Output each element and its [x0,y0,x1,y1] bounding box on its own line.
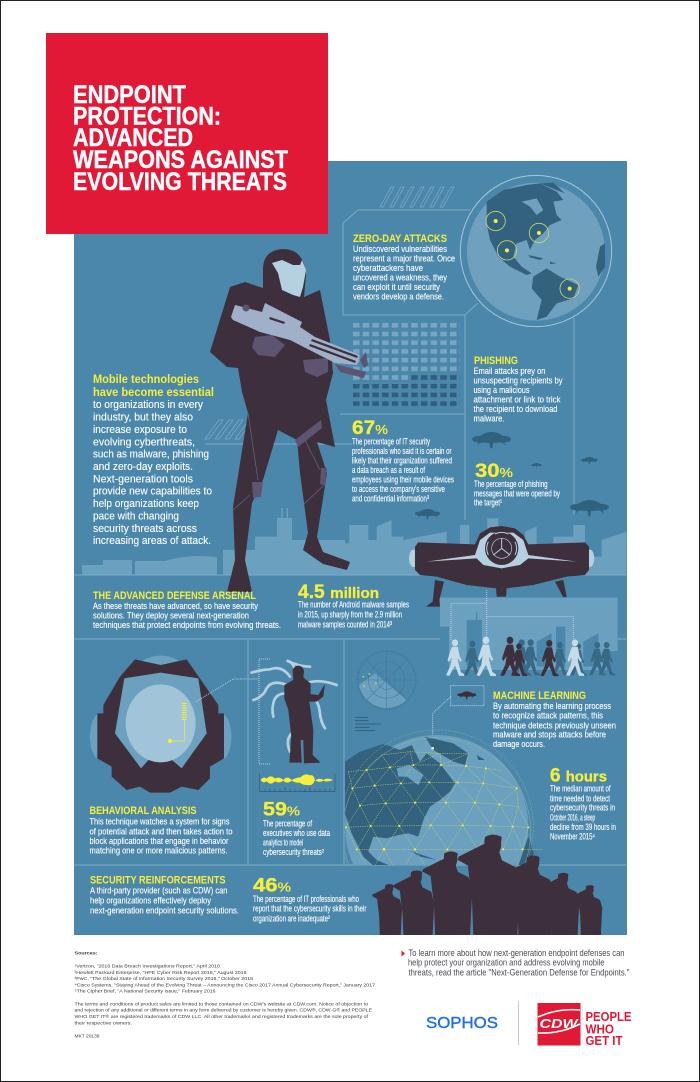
text: machine learning [493,690,616,749]
stat: 4.5 million: in 2015, up sharply from the 2.9 million [298,609,402,619]
text: mobile technologies intro: evolving cyberthreats, [93,436,195,448]
stat: 30 percent: messages that were opened by [474,488,560,498]
text: mobile technologies intro: help organizations keep [93,498,199,510]
text: security reinforcements: next-generation endpoint security solutions. [90,905,239,915]
text: zero-day attacks: vendors develop a defense. [353,292,444,302]
stat: 46 percent: 46 % [253,876,292,897]
illustration: saluting soldiers [372,834,602,1018]
stat: 59 percent: cybersecurity threats² [263,847,324,857]
sources and legal text [74,951,375,1039]
stat: 67 percent [352,418,454,504]
text: behavioral analysis: BEHAVIORAL ANALYSIS [90,805,196,817]
text: mobile technologies intro: increase exposure to [93,424,187,436]
text: zero-day attacks: ZERO-DAY ATTACKS [353,233,447,245]
text: zero-day attacks [353,233,455,302]
heading: ENDPOINT [73,81,186,109]
stat: 4.5 million: 4.5 million [298,582,379,603]
text: phishing: the recipient to download [474,404,558,414]
stat: 67 percent: The percentage of IT security [352,436,430,446]
icon: building block behind crowd [440,590,618,670]
stat: 4.5 million: The number of Android malware samples [298,600,409,610]
text: advanced defense arsenal: THE ADVANCED DEFENSE ARSENAL [93,590,256,602]
text: advanced defense arsenal: solutions. They deploy several next-generation [93,611,249,621]
text: mobile technologies intro [93,372,214,547]
stat: 30 percent [474,461,560,508]
stat: 6 hours: November 2015⁴ [550,831,595,841]
stat: 59 percent: executives who use data [263,828,330,838]
stat: 4.5 million [298,582,409,629]
text: mobile technologies intro: Next-generation tools [93,473,193,485]
stat: 6 hours: decline from 39 hours in [550,822,616,832]
stat: 46 percent: organization are inadequate² [253,913,330,923]
stat: 46 percent: report that the cybersecurity skills in their [253,904,366,914]
stat: 67 percent: 67% [352,418,388,439]
call to action [402,948,630,978]
sources and legal text: MKT 20139 [74,1033,100,1039]
sources and legal text: ⁵The Cipher Brief, "A National Security Issue," February 2016 [74,989,216,995]
sources and legal text: ¹Verizon, "2016 Data Breach Investigations Report," April 2016 [74,964,220,970]
text: mobile technologies intro: to organizations in every [93,399,203,411]
text: phishing [474,355,563,424]
heading: ADVANCED [73,124,193,152]
logo: CDW: PEOPLE [586,1009,632,1024]
logo: CDW: GET IT [586,1033,623,1048]
frame lines and stripes [74,187,627,865]
panel: blue background [74,161,627,935]
text: machine learning: technique detects previously unseen [493,720,616,730]
icon: behavioral analysis helmet [90,656,270,793]
skyline [82,508,627,575]
heading: WEAPONS AGAINST [73,146,288,174]
stat: 67 percent: likely that their organization suffered [352,455,452,465]
text: phishing: PHISHING [474,355,518,367]
stat: 4.5 million: malware samples counted in 2014³ [298,619,392,629]
text: security reinforcements [90,875,239,915]
stat: 59 percent: 59% [263,800,300,821]
logo: CDW: CDW [540,1016,580,1031]
text: zero-day attacks: Undiscovered vulnerabilities [353,244,447,254]
icon: top globe with target markers [460,175,612,327]
sources and legal text: and rejection of any additional or different terms in any form delivered by customer is hereby given. CDW®, CDW·G® and PEOPLE [74,1007,372,1014]
stat: 6 hours [550,766,616,841]
stat: 6 hours: The median amount of [550,784,611,794]
text: mobile technologies intro: Mobile technologies [93,372,199,386]
text: security reinforcements: SECURITY REINFORCEMENTS [90,875,226,887]
text: zero-day attacks: uncovered a weakness, they [353,272,447,282]
sources and legal text: ³PwC, "The Global State of Information Security Survey 2016," October 2015 [74,976,253,982]
stat: 6 hours: October 2016, a steep [550,812,595,822]
text: mobile technologies intro: pace with changing [93,510,179,522]
text: phishing: attachment or link to trick [474,394,561,404]
sources and legal text: ²Hewlett Packard Enterprise, "HPE Cyber Risk Report 2016," August 2016 [74,970,247,976]
stat: 46 percent: The percentage of IT professionals who [253,894,359,904]
stat: 59 percent [263,800,330,857]
text: mobile technologies intro: such as malware, phishing [93,448,209,460]
stat: 30 percent: the target¹ [474,498,502,508]
text: mobile technologies intro: industry, but they also [93,412,193,424]
sources and legal text: their respective owners. [74,1020,132,1026]
text: mobile technologies intro: provide new capabilities to [93,486,212,498]
text: machine learning: malware and stops attacks before [493,730,606,740]
text: mobile technologies intro: security threats across [93,523,197,535]
text: behavioral analysis: block applications that engage in behavior [90,836,228,846]
call to action: help protect your organization and address evolving mobile [408,958,604,969]
stat: 67 percent: a data breach as a result of [352,465,425,475]
text: machine learning: By automating the learning process [493,701,611,711]
sources and legal text: ⁴Cisco Systems, "Staying Ahead of the Evolving Threat – Announcing the Cisco 2017 Annual Cybersecurity Report," January 2017 [74,982,375,988]
call to action: To learn more about how next-generation endpoint defenses can [408,948,624,959]
text: mobile technologies intro: have become essential [93,385,214,399]
text: zero-day attacks: cyberattackers have [353,263,423,273]
icon: dotted box with drone [433,686,484,748]
sources and legal text: Sources: [74,951,98,957]
icon: radar [355,651,416,731]
text: machine learning: MACHINE LEARNING [493,690,586,702]
heading: EVOLVING THREATS [73,168,287,196]
stat: 67 percent: and confidential information³ [352,494,429,504]
icon: wire-mesh globe [345,730,542,865]
illustration: armored soldier with rifle [210,249,368,592]
text: zero-day attacks: can exploit it until security [353,282,440,292]
text: advanced defense arsenal: techniques that protect endpoints from evolving threats. [93,620,281,630]
call to action: threats, read the article "Next-Generation Defense for Endpoints." [408,967,630,978]
stat: 59 percent: analytics to model [263,837,303,847]
stat: 30 percent: The percentage of phishing [474,479,548,489]
stat: 46 percent [253,876,366,923]
text: machine learning: damage occurs. [493,739,545,749]
text: phishing: using a malicious [474,385,530,395]
sources and legal text: WHO GET IT® are registered trademarks of CDW LLC. All other trademarks and registered trademarks are the sole property of [74,1013,369,1020]
logo: Sophos: SOPHOS [426,1015,498,1032]
text: phishing: malware. [474,414,504,424]
text: behavioral analysis: matching one or more malicious patterns. [90,845,228,855]
text: advanced defense arsenal: As these threats have advanced, so have security [93,601,258,611]
stat: 6 hours: cybersecurity threats in [550,803,615,813]
icon: person with tentacles and waveform [252,661,337,791]
text: behavioral analysis: of potential attack and then takes action to [90,826,232,836]
text: zero-day attacks: represent a major threat. Once [353,254,455,264]
heading [73,81,288,196]
stat: 67 percent: professionals who said it is certain or [352,446,452,456]
crowd of people [446,637,615,676]
text: behavioral analysis: This technique watches a system for signs [90,817,230,827]
text: security reinforcements: A third-party provider (such as CDW) can [90,886,228,896]
logo: CDW: WHO [586,1021,614,1036]
text: security reinforcements: help organizations effectively deploy [90,895,211,905]
text: mobile technologies intro: and zero-day exploits. [93,461,193,473]
sources and legal text: The terms and conditions of product sales are limited to those contained on CDW's website at CDW.com. Notice of objection to [74,1001,368,1007]
stat: 6 hours: 6 hours [550,766,607,787]
stat: 6 hours: time needed to detect [550,793,610,803]
text: phishing: unsuspecting recipients by [474,376,563,386]
logo: CDW [538,1003,632,1048]
icon: small drones [415,432,609,520]
text: mobile technologies intro: increasing areas of attack. [93,535,211,547]
stat: 30 percent: 30 % [475,461,514,482]
text: phishing: Email attacks prey on [474,366,546,376]
dot grid [353,323,460,409]
panel: title block [46,33,328,234]
stat: 67 percent: employees using their mobile devices [352,474,454,484]
heading: PROTECTION: [73,102,221,130]
text: behavioral analysis [90,805,232,855]
icon: hovering aircraft [409,526,594,607]
text: machine learning: to recognize attack patterns, this [493,711,603,721]
text: advanced defense arsenal [93,590,281,630]
divider [518,1001,519,1045]
stat: 59 percent: The percentage of [263,819,312,829]
stat: 67 percent: to access the company's sensitive [352,484,445,494]
